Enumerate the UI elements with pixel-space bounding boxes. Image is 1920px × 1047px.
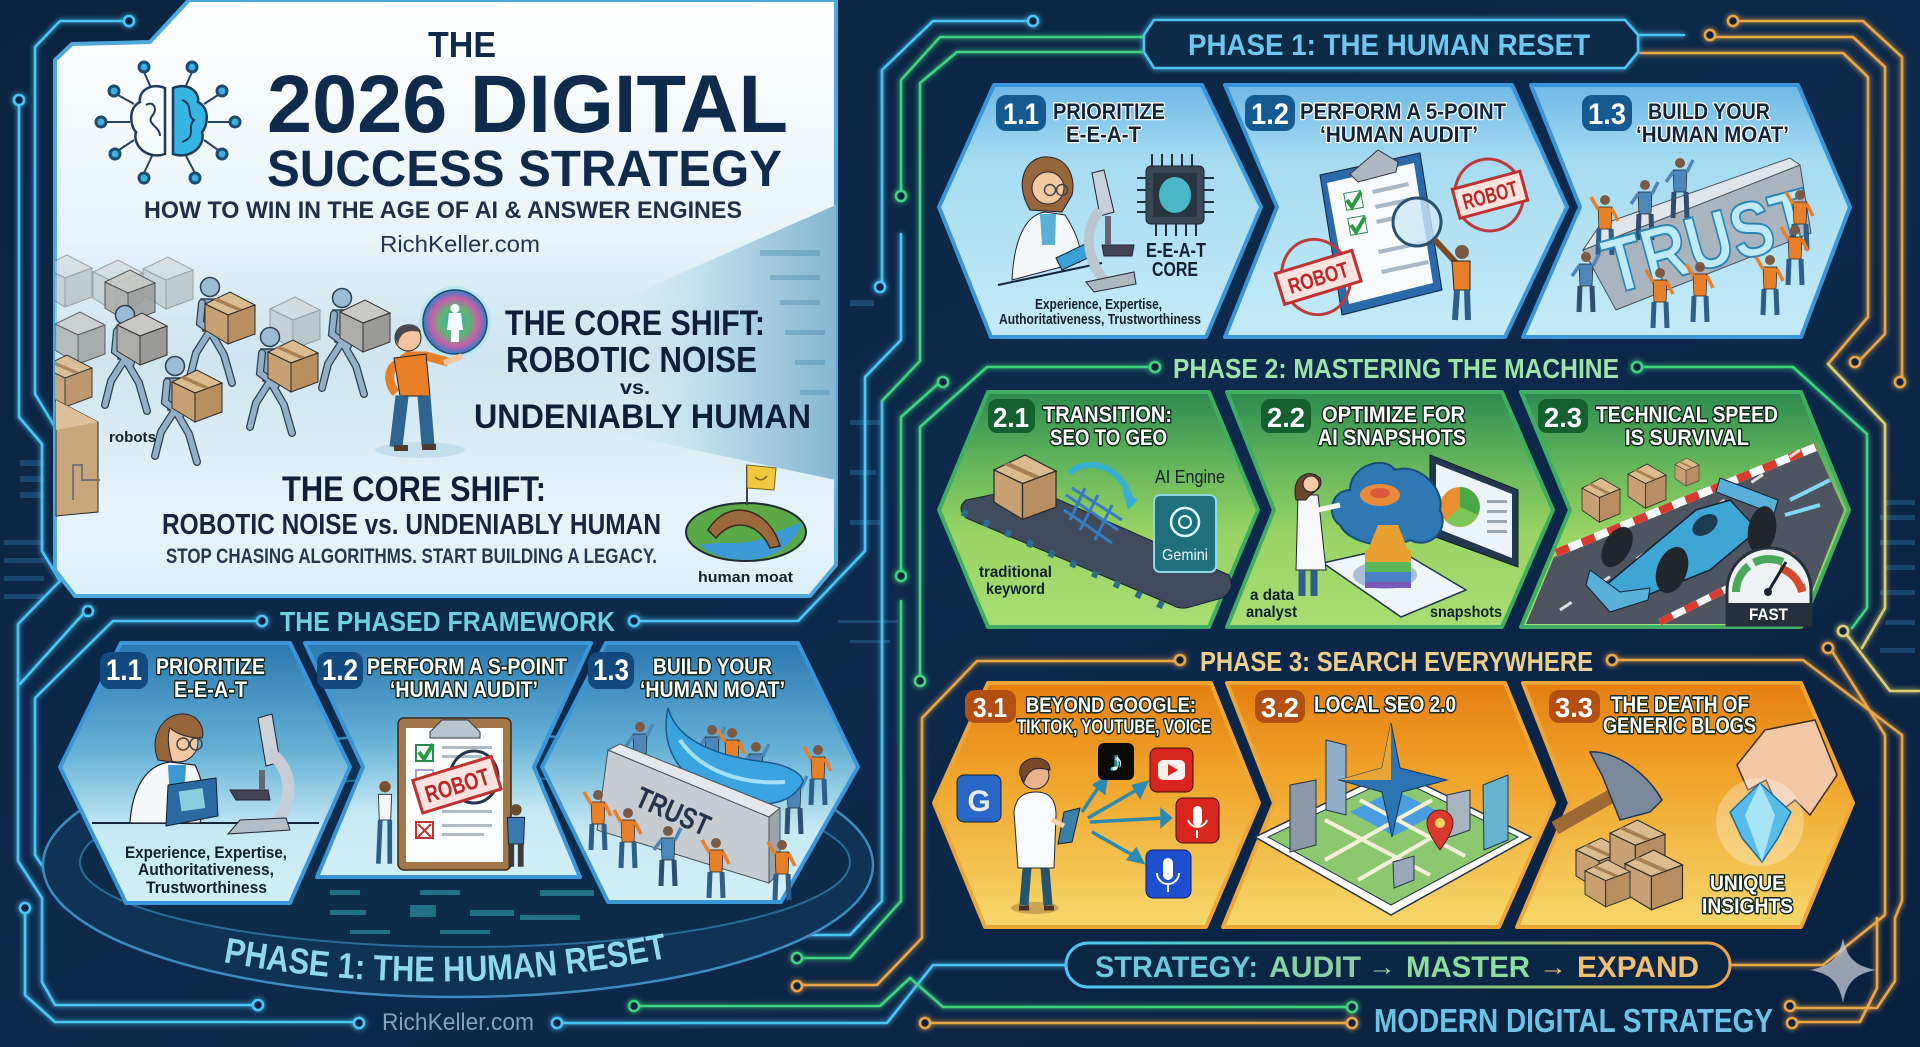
badge: 1.1	[1003, 98, 1039, 131]
strategy pill: →	[1539, 954, 1567, 981]
panel: 3.3 generic blogs	[1517, 683, 1853, 927]
clipboard with stamps	[1269, 150, 1533, 324]
title: ‘HUMAN MOAT’	[1636, 122, 1789, 147]
strategy pill: MASTER	[1406, 951, 1530, 984]
conveyor	[961, 455, 1231, 612]
header: phase 1	[1144, 20, 1638, 68]
caption 1.1: Trustworthiness	[146, 878, 267, 897]
heading: core shift lower: STOP CHASING ALGORITHMS. START BUILDING A LEGACY.	[166, 545, 657, 568]
icon: tiktok tile: ♪	[1110, 746, 1124, 777]
title: PERFORM A 5-POINT	[1300, 99, 1507, 124]
strategy pill	[1066, 943, 1730, 987]
panel: 3.2 local seo	[1223, 683, 1554, 927]
trust wall: TRUST	[1593, 171, 1821, 311]
clipboard audit: ROBOT	[422, 764, 493, 809]
data analyst label	[1246, 587, 1298, 621]
panel: 3.1 beyond google	[934, 683, 1259, 927]
icon: youtube tile	[1150, 748, 1193, 792]
city backdrop	[55, 205, 836, 540]
data analyst with cloud and monitor	[1295, 455, 1518, 617]
gemini chip	[1154, 495, 1216, 572]
badge 1.2: 1.2	[322, 654, 358, 687]
strategy pill: →	[1368, 954, 1396, 981]
title: SUCCESS STRATEGY	[267, 140, 782, 197]
title 1.1	[156, 654, 265, 702]
unique insights label: INSIGHTS	[1702, 895, 1793, 918]
hand	[1737, 720, 1837, 815]
unique insights label: UNIQUE	[1710, 872, 1785, 895]
unique insights label	[1702, 872, 1793, 918]
heading: core shift lower	[162, 470, 661, 568]
badge: 3.1	[973, 692, 1007, 723]
footer: modern digital strategy: MODERN DIGITAL STRATEGY	[1374, 1002, 1773, 1039]
panel: 1.3 human moat	[1523, 85, 1850, 337]
title: BUILD YOUR	[1648, 99, 1770, 124]
icon: google tile	[957, 775, 1001, 822]
strategy pill: AUDIT	[1269, 951, 1361, 984]
title	[1636, 99, 1789, 147]
title: AI SNAPSHOTS	[1318, 425, 1466, 450]
faint data texture	[4, 300, 1915, 653]
badge: 2.3	[1544, 402, 1582, 433]
panel: 2.1 seo to geo	[939, 392, 1258, 627]
title 1.1: E-E-A-T	[174, 677, 248, 702]
heading: core shift lower: ROBOTIC NOISE vs. UNDENIABLY HUMAN	[162, 509, 661, 541]
title: TECHNICAL SPEED	[1596, 402, 1778, 427]
speed gauge	[1727, 548, 1811, 625]
caption	[999, 297, 1201, 328]
title	[1300, 99, 1507, 147]
title: LOCAL SEO 2.0	[1314, 692, 1456, 717]
badge: 3.2	[1261, 692, 1299, 723]
title: PRIORITIZE	[1053, 99, 1165, 124]
icon: red mic tile	[1176, 798, 1219, 843]
label: eeat core: CORE	[1152, 259, 1198, 281]
panel: 1.1 prioritize	[939, 85, 1261, 337]
heading: core shift lower: THE CORE SHIFT:	[282, 470, 546, 509]
title	[267, 24, 788, 197]
title: THE DEATH OF	[1611, 692, 1749, 717]
icon: brain with network nodes	[96, 62, 240, 183]
gemini chip: Gemini	[1162, 547, 1208, 564]
heading: core shift right: vs.	[620, 378, 650, 399]
title 1.2	[367, 654, 567, 702]
title: GENERIC BLOGS	[1603, 713, 1756, 738]
icon: google tile: G	[967, 785, 991, 818]
caption 1.1: Experience, Expertise,	[125, 843, 287, 862]
icon: blue mic tile	[1146, 850, 1191, 898]
subtitle: HOW TO WIN IN THE AGE OF AI & ANSWER ENGINES	[144, 197, 742, 224]
race car	[1586, 478, 1830, 612]
title 1.3	[640, 654, 785, 702]
boxes	[1582, 458, 1699, 522]
icon: tiktok tile: ♪	[1108, 746, 1122, 777]
badge: 3.3	[1555, 692, 1593, 723]
badge: 2.1	[993, 402, 1029, 433]
panel: 1.2 human audit	[1225, 85, 1567, 337]
title 1.3: ‘HUMAN MOAT’	[640, 677, 785, 702]
title 1.1: PRIORITIZE	[156, 654, 265, 679]
trust wall and moat	[584, 708, 831, 900]
road	[1526, 450, 1844, 624]
badge: 1.3	[1588, 98, 1626, 131]
robots carrying boxes	[42, 255, 390, 516]
header: phase 2: PHASE 2: MASTERING THE MACHINE	[1173, 353, 1619, 384]
scientist with tablet	[1011, 758, 1080, 914]
heading: core shift right: THE CORE SHIFT:	[505, 304, 765, 343]
title: TIKTOK, YOUTUBE, VOICE	[1017, 717, 1211, 738]
clipboard audit	[378, 718, 525, 870]
ai engine label: AI Engine	[1155, 467, 1225, 487]
header: phase 1: PHASE 1: THE HUMAN RESET	[1188, 29, 1590, 62]
label: eeat core	[1146, 240, 1206, 281]
eeat chip	[1137, 154, 1214, 236]
label: phase 1 on platform rim: PHASE 1: THE HUMAN RESET	[225, 933, 664, 982]
icon: human moat island	[686, 465, 806, 561]
heading: core shift right: UNDENIABLY HUMAN	[474, 398, 811, 436]
title: E-E-A-T	[1066, 122, 1142, 147]
panel: 2.2 ai snapshots	[1227, 392, 1553, 627]
title: OPTIMIZE FOR	[1322, 402, 1465, 427]
human holding globe	[375, 286, 491, 458]
title: TRANSITION:	[1043, 402, 1172, 427]
title 1.2: PERFORM A S-POINT	[367, 654, 567, 679]
label: eeat core: E-E-A-T	[1146, 240, 1206, 262]
clipboard with stamps: ROBOT	[1285, 257, 1352, 299]
panel: framework 1.1	[60, 643, 350, 903]
title: 2026 DIGITAL	[267, 59, 788, 150]
strategy pill: EXPAND	[1577, 951, 1699, 984]
strategy pill: STRATEGY:	[1095, 951, 1258, 984]
title: THE	[428, 24, 496, 65]
map and star	[1255, 723, 1531, 915]
title	[1596, 402, 1778, 450]
title: IS SURVIVAL	[1625, 425, 1749, 450]
data analyst label: analyst	[1246, 604, 1298, 621]
panel: framework 1.2	[305, 643, 591, 877]
title	[1017, 694, 1211, 738]
badge: 2.2	[1267, 402, 1305, 433]
title: ‘HUMAN AUDIT’	[1320, 122, 1478, 147]
title	[1318, 402, 1466, 450]
badge: 1.2	[1251, 98, 1289, 131]
icon: sparkle watermark	[1810, 938, 1876, 1003]
title	[1043, 402, 1172, 450]
heading: core shift right	[474, 304, 811, 436]
caption 1.1: Authoritativeness,	[138, 860, 274, 879]
platform disc	[43, 733, 873, 997]
title 1.2: ‘HUMAN AUDIT’	[390, 677, 538, 702]
panel: title and core shift	[42, 0, 836, 596]
header: phase 3: PHASE 3: SEARCH EVERYWHERE	[1200, 646, 1593, 677]
panel: 2.3 technical speed	[1521, 392, 1849, 627]
title	[1603, 692, 1756, 738]
traditional keyword label: traditional	[979, 564, 1052, 581]
title 1.3: BUILD YOUR	[653, 654, 772, 679]
title: SEO TO GEO	[1050, 425, 1167, 450]
label: human moat: human moat	[698, 569, 793, 586]
heading: the phased framework: THE PHASED FRAMEWORK	[280, 606, 615, 637]
caption: Experience, Expertise,	[1035, 297, 1162, 313]
caption: Authoritativeness, Trustworthiness	[999, 312, 1201, 328]
traditional keyword label	[979, 564, 1052, 598]
scientist and microscope	[998, 157, 1136, 292]
title: BEYOND GOOGLE:	[1026, 694, 1196, 717]
icon: tiktok tile	[1098, 743, 1134, 780]
data analyst label: a data	[1250, 587, 1294, 604]
badge 1.1: 1.1	[106, 654, 142, 687]
trust wall and moat: TRUST	[630, 781, 715, 843]
traditional keyword label: keyword	[986, 581, 1045, 598]
heading: core shift right: ROBOTIC NOISE	[506, 339, 757, 380]
badge 1.3: 1.3	[593, 654, 629, 687]
website footer: RichKeller.com	[382, 1009, 534, 1036]
snapshots label: snapshots	[1430, 604, 1502, 621]
hammer and boxes	[1555, 752, 1682, 910]
scientist with microscope	[92, 714, 319, 834]
panel: framework 1.3	[542, 643, 858, 902]
speed gauge: FAST	[1749, 605, 1789, 624]
clipboard with stamps: ROBOT	[1460, 176, 1521, 215]
arrows	[1082, 778, 1170, 862]
website credit: RichKeller.com	[380, 231, 540, 257]
gem	[1716, 778, 1804, 866]
caption 1.1	[125, 843, 287, 897]
label: robots: robots	[109, 429, 156, 446]
title	[1053, 99, 1165, 147]
